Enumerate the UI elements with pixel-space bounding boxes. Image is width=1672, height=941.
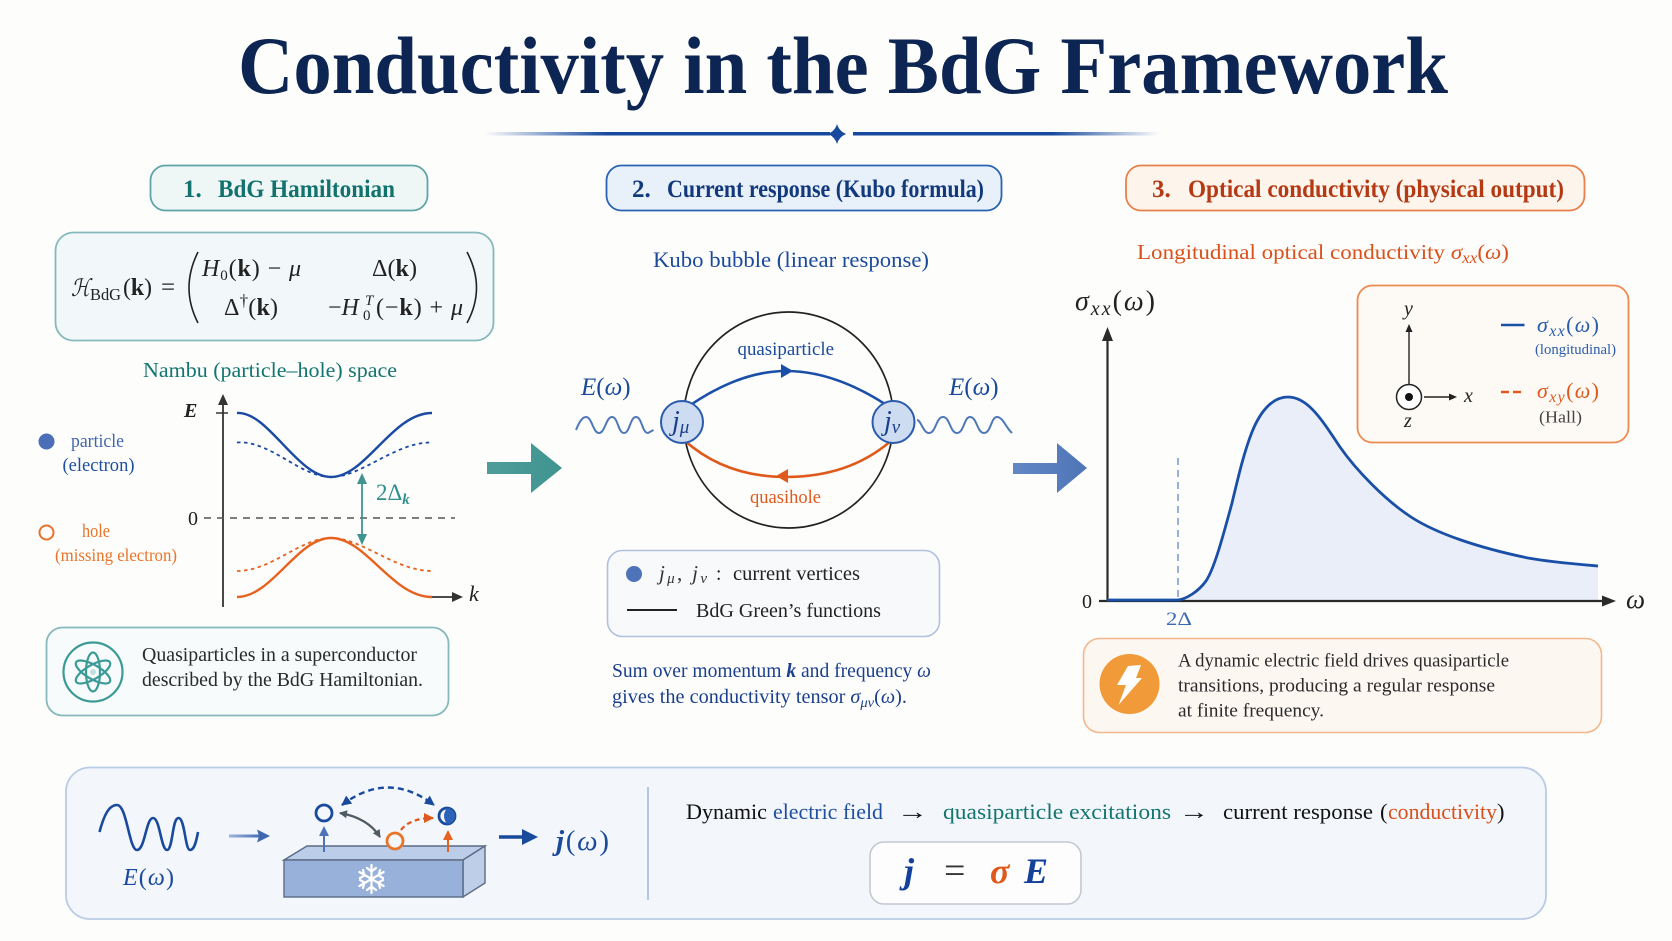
conductivity subheading: Longitudinal optical conductivity σ: [1137, 240, 1461, 264]
area under curve: [1178, 397, 1598, 601]
formula box j = sigma E: j: [899, 851, 915, 891]
Kubo bubble diagram: [576, 312, 1012, 528]
Hall legend item: σ: [1537, 378, 1549, 403]
icon: lightning bolt: [1100, 654, 1160, 714]
callout text: described by the BdG Hamiltonian.: [142, 669, 423, 691]
Hall legend item: [1501, 378, 1599, 426]
summation note: μν: [859, 696, 875, 711]
diagram legend box: ,: [677, 561, 690, 585]
hole bands: [237, 538, 432, 597]
callout: quasiparticles: [46, 628, 448, 716]
summary sentence: →: [897, 799, 928, 824]
Hamiltonian matrix formula box: (: [248, 295, 256, 321]
Hamiltonian matrix formula box: −H: [328, 295, 361, 321]
chart: sigma xx vs omega: [1075, 286, 1645, 630]
section heading pill 2: 2.: [632, 176, 651, 203]
section heading pill 1: 1.: [183, 176, 202, 203]
summary sentence: ): [1497, 799, 1504, 824]
Hamiltonian matrix formula box: k): [256, 295, 278, 321]
vertex j nu: ν: [892, 417, 901, 438]
summation note: Sum over momentum k and frequency ω: [612, 661, 931, 682]
section heading pill 2: Current response (Kubo formula): [667, 176, 984, 203]
summary sentence: current response: [1223, 799, 1373, 824]
Hamiltonian matrix formula box: 0: [363, 308, 370, 324]
conductivity curve: [1107, 397, 1598, 600]
Hamiltonian matrix formula box: (k): [123, 275, 152, 301]
longitudinal legend item: (: [1566, 312, 1573, 337]
Hamiltonian matrix formula box: T: [365, 293, 375, 309]
incoming field wave: [576, 374, 654, 433]
current response label: j(ω): [552, 825, 609, 857]
vertex j nu: j: [884, 406, 892, 437]
section heading pill 2: [606, 166, 1002, 210]
panel: 1. BdG Hamiltonian: [38, 166, 494, 716]
Kubo bubble heading: Kubo bubble (linear response): [653, 247, 929, 272]
outer loop: [684, 312, 894, 528]
summary sentence: conductivity: [1388, 799, 1498, 824]
energy axis: E: [183, 400, 197, 422]
Hamiltonian matrix formula box: k) − μ: [238, 256, 301, 282]
formula box j = sigma E: σ: [990, 851, 1011, 891]
longitudinal legend item: [1501, 312, 1616, 358]
diagram legend box: μ: [666, 571, 675, 587]
Hamiltonian matrix formula box: (: [229, 256, 237, 282]
diagram legend box: :: [716, 564, 721, 585]
quasihole line: [684, 440, 892, 508]
Hamiltonian matrix formula box: Δ(k): [372, 256, 417, 282]
x axis and label: [1099, 584, 1645, 614]
summation note: [612, 661, 931, 711]
callout text: A dynamic electric field drives quasiparticle: [1178, 650, 1509, 672]
summary sentence: Dynamic: [686, 799, 767, 824]
Hamiltonian matrix formula box: †: [240, 291, 248, 310]
diagram legend box: ν: [700, 571, 707, 587]
superconductor block: [284, 846, 485, 897]
y axis and label: (: [1113, 286, 1122, 317]
Hamiltonian matrix formula box: BdG: [90, 285, 121, 304]
y axis and label: 0: [1082, 591, 1092, 613]
k axis: k: [469, 581, 480, 606]
conductivity subheading: ω): [1485, 240, 1508, 264]
callout text: Quasiparticles in a superconductor: [142, 644, 417, 666]
diagram legend box: [608, 550, 940, 636]
callout: dynamic field: [1084, 638, 1602, 732]
gap arrow 2 delta k: [357, 473, 410, 545]
summation note: ω).: [881, 687, 907, 708]
panel: 2. Current response: [576, 166, 1012, 711]
chart: BdG band dispersion: [183, 394, 480, 607]
section heading pill 3: [1126, 166, 1584, 210]
Hamiltonian matrix formula box: (−k) + μ: [376, 295, 463, 321]
legend: particle and hole: (missing electron): [55, 545, 177, 566]
section heading pill 3: Optical conductivity (physical output): [1188, 176, 1564, 203]
vertex j mu: μ: [679, 417, 689, 438]
summation note: gives the conductivity tensor σ: [612, 687, 860, 708]
section heading pill 1: BdG Hamiltonian: [218, 176, 395, 203]
legend: particle and hole: (electron): [62, 455, 134, 476]
outgoing field wave: E(ω): [948, 374, 999, 401]
Hamiltonian matrix formula box: ℋ: [71, 276, 93, 302]
y axis and label: xx: [1090, 298, 1111, 320]
coordinate axes: x: [1463, 385, 1473, 407]
callout text: at finite frequency.: [1178, 700, 1324, 722]
formula box j = sigma E: =: [944, 850, 965, 892]
Hall legend item: ω): [1575, 378, 1599, 403]
section heading pill 1: [150, 166, 428, 210]
gap arrow 2 delta k: k: [402, 492, 410, 508]
arrow: sample to current: [499, 829, 538, 845]
arrow: panel 2 to panel 3: [1013, 443, 1087, 493]
legend: particle and hole: [38, 432, 177, 566]
Hall legend item: (Hall): [1539, 408, 1582, 426]
Hamiltonian matrix formula box: [56, 232, 494, 340]
longitudinal legend item: σ: [1537, 312, 1549, 337]
summary sentence: [686, 799, 1504, 824]
x axis and label: ω: [1626, 584, 1645, 614]
vertex j mu: [661, 401, 703, 443]
coordinate axes: y: [1402, 298, 1413, 320]
legend: particle and hole: hole: [82, 521, 110, 542]
quasiparticle excitation sketch: [316, 788, 455, 852]
formula box j = sigma E: [870, 842, 1081, 904]
panel: bottom summary: [66, 768, 1546, 919]
Hall legend item: xy: [1548, 389, 1566, 406]
icon: atom: [64, 642, 122, 702]
icon: snowflake: [359, 865, 384, 893]
gap arrow 2 delta k: 2Δ: [376, 480, 402, 505]
panel: 3. Optical conductivity: [1075, 166, 1645, 732]
arrow: field to sample: [229, 830, 270, 842]
diagram legend box: j: [659, 561, 665, 585]
summary sentence: →: [1179, 799, 1209, 824]
quasiparticle line: [689, 340, 888, 406]
y axis and label: ω): [1124, 286, 1155, 317]
title divider with diamond: [485, 124, 1159, 144]
Hamiltonian matrix formula box: H: [201, 256, 221, 282]
summation note: (: [874, 687, 881, 708]
quasihole line: quasihole: [750, 488, 821, 508]
incoming field wave: E(ω): [580, 374, 631, 401]
conductivity subheading: (: [1477, 240, 1485, 264]
diagram legend box: current vertices: [733, 564, 860, 585]
Hamiltonian matrix formula box: =: [161, 274, 175, 301]
callout text: transitions, producing a regular response: [1178, 676, 1495, 696]
energy axis: [183, 394, 228, 607]
arrow: panel 1 to panel 2: [487, 443, 562, 493]
y axis and label: σ: [1075, 286, 1090, 317]
Hall legend item: (: [1566, 378, 1573, 403]
conductivity subheading: xx: [1461, 250, 1477, 267]
y axis and label: [1075, 286, 1155, 613]
Hamiltonian matrix formula box: Δ: [224, 295, 239, 321]
k axis: [430, 581, 480, 606]
vertex j mu: j: [672, 406, 680, 437]
legend: particle and hole: particle: [71, 432, 124, 452]
title: Conductivity in the BdG Framework: [238, 20, 1448, 111]
electron bands: [237, 413, 432, 477]
diagram legend box: j: [692, 561, 698, 585]
threshold 2 delta: 2Δ: [1166, 609, 1192, 630]
vertex j nu: [872, 401, 914, 443]
longitudinal legend item: (longitudinal): [1535, 342, 1616, 358]
coordinate axes: [1396, 298, 1473, 432]
zero line: 0: [188, 508, 198, 530]
quasiparticle line: quasiparticle: [738, 340, 834, 360]
outgoing field wave: [917, 374, 1012, 433]
section heading pill 3: 3.: [1152, 176, 1171, 203]
summary sentence: quasiparticle excitations: [943, 799, 1171, 824]
icon: electric field wave: [100, 805, 198, 891]
icon: electric field wave: E(ω): [122, 865, 174, 891]
Nambu space heading: Nambu (particle–hole) space: [143, 358, 397, 382]
Hamiltonian matrix formula box: 0: [220, 268, 228, 284]
summary sentence: electric field: [773, 799, 883, 824]
longitudinal legend item: xx: [1548, 323, 1565, 340]
callout text: [142, 644, 423, 691]
longitudinal legend item: ω): [1575, 312, 1599, 337]
formula box j = sigma E: E: [1023, 851, 1048, 891]
divider: [647, 787, 649, 900]
diagram legend box: BdG Green’s functions: [696, 601, 881, 622]
callout text: [1178, 650, 1509, 722]
coordinate axes: z: [1403, 410, 1412, 432]
summary sentence: (: [1380, 799, 1388, 824]
legend box with axes: [1358, 286, 1628, 442]
